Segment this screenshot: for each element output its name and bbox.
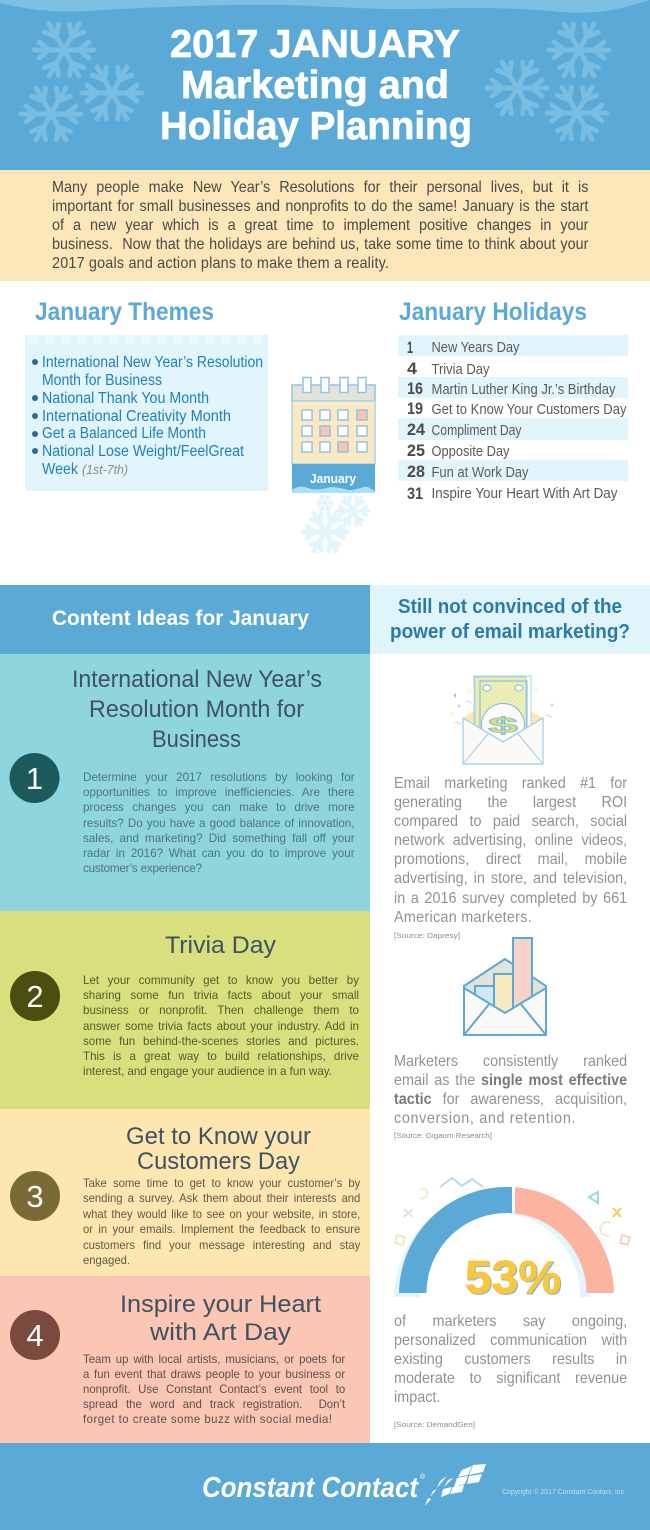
- source: DemandGen: [Source: DemandGen]: [394, 1420, 475, 1429]
- number badge 4: [10, 1310, 60, 1360]
- gauge pink segment: [515, 1187, 614, 1293]
- copyright: Copyright © 2017 Constant Contact, Inc.: [502, 1488, 626, 1496]
- themes list: Week: [42, 461, 78, 478]
- number badge 2: 2: [26, 979, 44, 1014]
- holiday rows: Trivia Day: [432, 361, 490, 378]
- idea 2 body: business or nonprofit. Then challenge them to: [83, 1003, 359, 1017]
- panel: idea 4: [0, 1276, 370, 1443]
- themes list: National Lose Weight/FeelGreat: [42, 443, 245, 460]
- holiday rows: 31: [407, 484, 423, 503]
- intro panel: of a new year which is a great time to implement positive changes in your: [52, 217, 588, 234]
- text: email ROI: in a 2016 survey completed by 661: [394, 890, 627, 907]
- idea 1 heading: Resolution Month for: [89, 696, 304, 723]
- holiday rows: Martin Luther King Jr.’s Birthday: [432, 381, 616, 398]
- intro panel: 2017 goals and action plans to make them a reality.: [52, 255, 389, 272]
- holiday rows: [398, 335, 628, 503]
- holiday rows: 19: [407, 399, 423, 418]
- text: revenue impact: moderate to significant revenue: [394, 1370, 627, 1387]
- idea 4 body: spread the word and track registration. Don’t: [83, 1397, 345, 1411]
- gauge blue segment: [399, 1187, 512, 1293]
- heading: still not convinced: power of email marketing?: [390, 621, 630, 643]
- text: revenue impact: [394, 1312, 627, 1429]
- text: email ROI: compared to paid search, social: [394, 813, 627, 830]
- gauge value: 53%: [466, 1252, 562, 1304]
- idea 4 heading: with Art Day: [149, 1319, 291, 1346]
- panel: January themes: [25, 298, 268, 491]
- text: email ROI: network advertising, online videos,: [394, 832, 627, 849]
- text: email ROI: promotions, direct mail, mobile: [394, 851, 627, 868]
- intro panel: business. Now that the holidays are behind us, take some time to think about your: [52, 236, 588, 253]
- intro panel: important for small businesses and nonprofits to do the same! January is the start: [52, 198, 588, 215]
- text: email ROI: [394, 774, 627, 940]
- number badge 3: 3: [26, 1179, 44, 1214]
- idea 1 body: results? Do you have a good balance of innovation,: [83, 816, 355, 830]
- text: revenue impact: existing customers results in: [394, 1351, 627, 1368]
- holiday rows: 16: [407, 379, 423, 398]
- idea 2 body: Let your community get to know you better by: [83, 973, 359, 987]
- number badge 4: 4: [26, 1318, 44, 1353]
- idea 2 body: sharing some fun trivia facts about your small: [83, 988, 359, 1002]
- idea 3 body: engaged.: [83, 1253, 130, 1267]
- idea 3 heading: Customers Day: [137, 1148, 300, 1175]
- text: most effective tactic: [394, 1052, 627, 1140]
- idea 1 heading: International New Year’s: [72, 666, 322, 693]
- footer: [0, 1443, 650, 1530]
- holiday rows: 25: [407, 441, 425, 460]
- idea 3 heading: Get to Know your: [126, 1123, 311, 1150]
- title: Marketing and: [181, 64, 449, 107]
- heading: January Themes: January Themes: [35, 298, 214, 326]
- logo: Constant Contact: ®: [420, 1473, 426, 1481]
- icon: falling snowflakes: [296, 489, 375, 561]
- heading: content ideas: [0, 585, 370, 654]
- snowflakes left: [10, 9, 153, 155]
- idea 1 heading: [72, 666, 322, 753]
- idea 2 body: [83, 973, 359, 1085]
- idea 3 heading: [126, 1123, 311, 1175]
- idea 2 body: This is a great way to build relationships, drive: [83, 1049, 359, 1063]
- panel: idea 1: [0, 654, 370, 911]
- idea 1 body: sales, and marketing? Did something fall off your: [83, 831, 355, 845]
- idea 3 body: what they would like to see on your website, in store,: [83, 1207, 360, 1221]
- holiday rows: New Years Day: [432, 339, 520, 356]
- number badge 3: [10, 1171, 60, 1221]
- holiday rows: Inspire Your Heart With Art Day: [432, 485, 618, 502]
- idea 2 heading: Trivia Day: [165, 932, 276, 959]
- panel: idea 3: [0, 1109, 370, 1276]
- idea 1 heading: Business: [152, 726, 241, 753]
- idea 2 body: some fun behind-the-scenes stories and pictures.: [83, 1034, 359, 1048]
- icon: envelope with bar chart: [464, 938, 546, 1035]
- idea 3 body: sending a survey. Ask them about their interests and: [83, 1191, 360, 1205]
- heading: still not convinced: [370, 585, 650, 654]
- source: Gigaom Research: [Source: Gigaom Research]: [394, 1131, 492, 1140]
- themes list: International New Year’s Resolution: [42, 354, 263, 371]
- holiday rows: 24: [407, 420, 426, 439]
- chart: 53 percent gauge: [394, 1178, 630, 1304]
- themes list: Month for Business: [42, 372, 162, 389]
- themes list: National Thank You Month: [42, 390, 209, 407]
- holiday rows: 28: [407, 462, 425, 481]
- idea 4 body: nonprofit. Use Constant Contact’s event tool to: [83, 1382, 345, 1396]
- text: most effective tactic: email as the single most effective: [394, 1072, 627, 1089]
- idea 3 body: customers find your message interesting and stay: [83, 1238, 360, 1252]
- source: Dapresy: [Source: Dapresy]: [394, 931, 460, 940]
- idea 4 heading: [120, 1291, 321, 1346]
- number badge 1: [10, 753, 60, 803]
- title: 2017 JANUARY: [170, 23, 460, 66]
- heading: content ideas: Content Ideas for January: [52, 607, 309, 630]
- idea 3 body: Take some time to get to know your customer’s by: [83, 1176, 360, 1190]
- text: revenue impact: impact.: [394, 1389, 440, 1406]
- idea 3 body: or in your emails. Implement the feedback to ensure: [83, 1222, 360, 1236]
- idea 1 body: radar in 2016? What can you do to improve your: [83, 846, 355, 860]
- holiday rows: 4: [407, 359, 418, 378]
- title: Holiday Planning: [160, 105, 472, 148]
- logo mark: [425, 1464, 486, 1506]
- gauge value: 53%: [465, 1251, 561, 1303]
- logo: Constant Contact: Constant Contact: [202, 1472, 419, 1504]
- title: [160, 23, 472, 148]
- themes list: Get a Balanced Life Month: [42, 425, 206, 442]
- text: most effective tactic: conversion, and retention.: [394, 1110, 576, 1127]
- panel: January holidays: [398, 298, 628, 503]
- text: revenue impact: personalized communication with: [394, 1332, 627, 1349]
- text: most effective tactic: tactic for awareness, acquisition,: [394, 1091, 627, 1108]
- idea 1 body: opportunities to improve inefficiencies. Are there: [83, 785, 355, 799]
- snowflakes right: [476, 9, 620, 154]
- idea 1 body: [83, 770, 355, 882]
- icon: envelope with money: $: [488, 713, 518, 738]
- idea 1 body: process changes you can make to drive more: [83, 800, 355, 814]
- holiday rows: Compliment Day: [432, 422, 522, 439]
- gauge decorations: [395, 1178, 630, 1245]
- icon: envelope with money: [450, 676, 554, 764]
- heading: still not convinced: Still not convinced of the: [398, 596, 622, 618]
- logo: Constant Contact: [202, 1464, 486, 1506]
- top wave: [0, 0, 650, 13]
- text: revenue impact: of marketers say ongoing,: [394, 1313, 627, 1330]
- idea 4 body: Team up with local artists, musicians, or poets for: [83, 1352, 345, 1366]
- idea 2 body: interest, and engage your audience in a fun way.: [83, 1064, 332, 1078]
- intro panel: [0, 170, 650, 281]
- number badge 2: [10, 971, 60, 1021]
- number badge 1: 1: [26, 761, 43, 796]
- themes list: [32, 354, 263, 478]
- idea 3 body: [83, 1176, 360, 1272]
- text: email ROI: Email marketing ranked #1 for: [394, 775, 627, 792]
- idea 1 body: Determine your 2017 resolutions by looking for: [83, 770, 355, 784]
- icon: calendar: January: [310, 471, 357, 486]
- themes box: [25, 335, 268, 491]
- themes list: (1st-7th): [82, 462, 128, 477]
- idea 2 body: answer some trivia facts about your industry. Add in: [83, 1019, 359, 1033]
- holiday rows: Opposite Day: [432, 443, 510, 460]
- text: email ROI: advertising, in store, and television,: [394, 870, 627, 887]
- idea 1 body: customer’s experience?: [83, 861, 202, 875]
- text: most effective tactic: Marketers consistently ranked: [394, 1053, 627, 1070]
- text: email ROI: generating the largest ROI: [394, 794, 627, 811]
- themes list: International Creativity Month: [42, 408, 231, 425]
- intro panel: Many people make New Year’s Resolutions for their personal lives, but it is: [52, 179, 588, 196]
- header banner: [0, 0, 650, 170]
- idea 4 heading: Inspire your Heart: [120, 1291, 321, 1318]
- holiday rows: Fun at Work Day: [432, 464, 529, 481]
- heading: January Holidays: January Holidays: [399, 298, 587, 326]
- holiday rows: Get to Know Your Customers Day: [432, 401, 627, 418]
- icon: calendar: [292, 378, 375, 561]
- idea 4 body: a fun event that draws people to your business or: [83, 1367, 345, 1381]
- idea 4 body: [83, 1352, 345, 1432]
- idea 4 body: forget to create some buzz with social media!: [83, 1412, 332, 1426]
- text: email ROI: American marketers.: [394, 909, 532, 926]
- holiday rows: 1: [407, 338, 413, 357]
- panel: idea 2: [0, 911, 370, 1109]
